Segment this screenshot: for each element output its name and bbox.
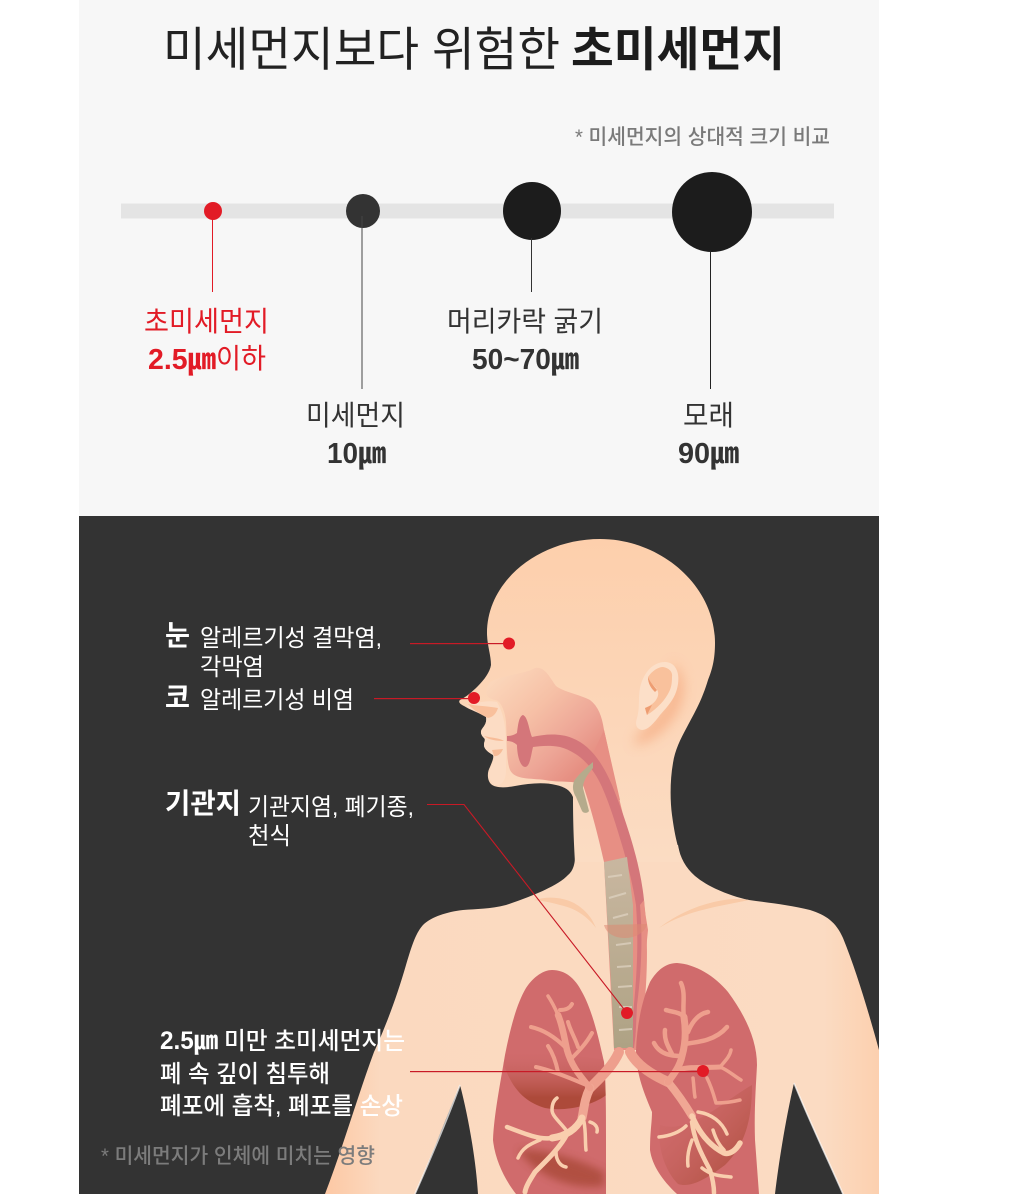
label: nose: 알레르기성 비염 [200,687,354,714]
item: sand: 90㎛ [678,438,739,470]
marker: bronchus [427,804,633,1019]
marker: nose [374,692,480,704]
label: lung damage: 폐포에 흡착, 폐포를 손상 [160,1093,403,1120]
thyroid cartilage [573,762,593,813]
label: lung damage: 2.5㎛ [160,1027,218,1056]
label: lung damage: 폐 속 깊이 침투해 [160,1061,330,1088]
left lung [493,970,610,1194]
right lung [636,963,759,1194]
armpit highlights [415,1083,843,1194]
label: lung damage: 미만 초미세먼지는 [224,1028,405,1055]
nasal and throat cavity [500,668,620,800]
title: 미세먼지보다 위험한 [163,23,560,76]
esophagus lighter edge [635,900,647,1048]
marker: eye [410,638,515,650]
label: bronchus: 기관지 [165,788,241,819]
panel: size comparison [79,0,879,516]
label: bronchus: 기관지염, 폐기종, [248,794,414,821]
lips and nostril [466,702,506,762]
item: ultrafine dust [144,202,269,376]
label: eye: 눈 [165,620,190,651]
thyroid gland shade [604,924,647,938]
item: ultrafine dust: 2.5㎛ [148,344,216,376]
scale bar [121,204,834,218]
item: fine dust [306,194,405,470]
label: nose [165,682,354,714]
item: sand: 모래 [683,400,734,431]
label: eye: 각막염 [200,654,264,681]
item: ultrafine dust: 초미세먼지 [144,306,269,337]
note: relative size comparison: * 미세먼지의 상대적 크기 비교 [575,126,830,149]
illustration: human respiratory system [325,539,879,1194]
item: hair thickness [447,182,603,376]
trachea [604,857,633,1048]
neck airway pink [583,730,648,1050]
item: hair thickness: 머리카락 굵기 [447,306,603,337]
ear [636,662,678,730]
bronchi left [507,996,619,1192]
bronchi right [630,983,741,1193]
label: eye [165,620,382,681]
clavicle shading [534,898,749,928]
item: fine dust: 미세먼지 [306,400,405,431]
item: sand [672,172,752,470]
item: ultrafine dust: 이하 [216,343,266,374]
caption: effects on the body: * 미세먼지가 인체에 미치는 영향 [101,1145,375,1168]
ear shadow [634,662,684,745]
torso and arms [325,845,879,1194]
label: bronchus: 천식 [248,823,291,850]
marker: lung [410,1065,709,1077]
item: hair thickness: 50~70㎛ [472,344,579,376]
item: fine dust: 10㎛ [327,438,386,470]
panel: health effects [79,516,879,1194]
title [163,23,785,76]
leader lines and markers [374,638,709,1077]
title: 초미세먼지 [571,23,785,76]
label: lung damage [160,1027,405,1120]
label: nose: 코 [165,682,190,713]
label: eye: 알레르기성 결막염, [200,625,382,652]
label: bronchus [165,788,414,850]
head and neck [459,539,715,862]
tongue and esophagus [507,715,645,1048]
